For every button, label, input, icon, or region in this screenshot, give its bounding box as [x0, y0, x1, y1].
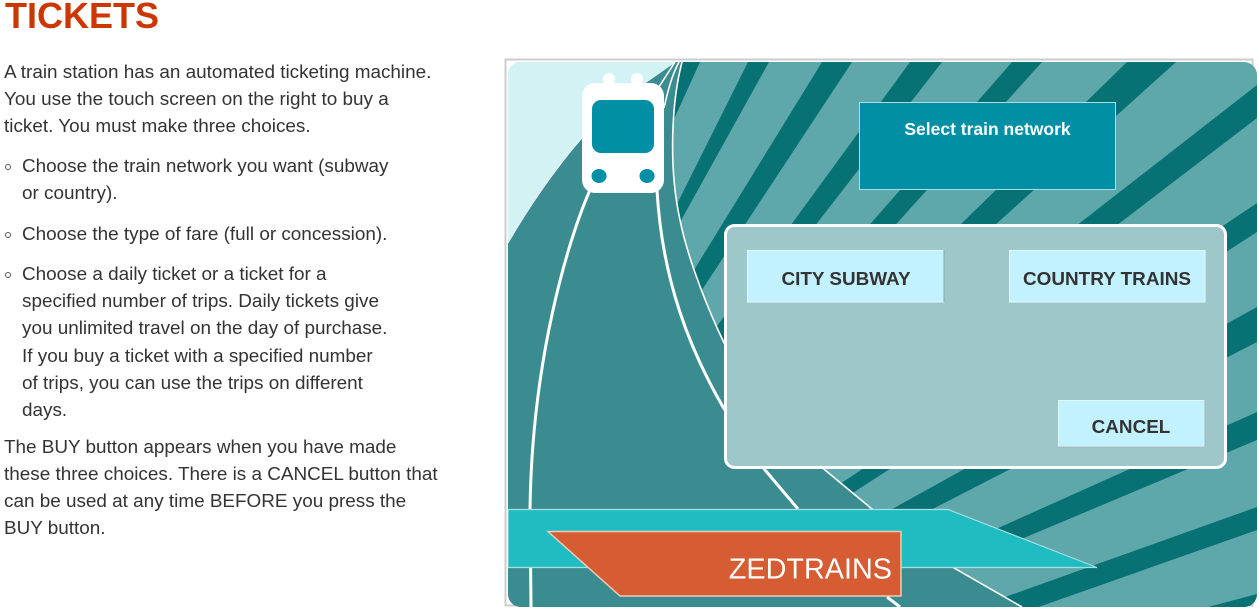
bullet: train network: or country).	[22, 183, 118, 204]
bullet: daily or trips ticket: Choose a daily ticket or a ticket for a	[22, 264, 326, 285]
bullet: daily or trips ticket: days.	[22, 400, 67, 421]
button: country trains: COUNTRY TRAINS	[1023, 269, 1191, 290]
text block: buy and cancel: can be used at any time BEFORE you press the	[4, 491, 406, 512]
train body	[582, 83, 664, 193]
text block: buy and cancel	[4, 437, 438, 539]
train	[582, 73, 664, 193]
distant rails	[657, 62, 679, 108]
bullet: daily or trips ticket	[5, 264, 387, 421]
prompt box: Select train network	[904, 119, 1071, 139]
train window	[592, 100, 654, 153]
ticketing machine screen	[506, 60, 1257, 610]
prompt box	[860, 102, 1116, 190]
sky	[508, 62, 676, 243]
text block: introduction: A train station has an automated ticketing machine.	[4, 62, 431, 83]
teal band	[508, 510, 1097, 568]
button: city subway	[748, 250, 944, 302]
button: city subway: CITY SUBWAY	[781, 269, 911, 290]
bullet: daily or trips ticket: If you buy a ticket with a specified number	[22, 346, 373, 367]
bullet: daily or trips ticket: you unlimited travel on the day of purchase.	[22, 318, 387, 339]
zedtrains banner: ZEDTRAINS	[729, 554, 892, 586]
text block: introduction	[4, 62, 431, 137]
options panel	[726, 226, 1226, 468]
bullet: type of fare: Choose the type of fare (full or concession).	[22, 224, 387, 245]
left rail	[530, 190, 590, 607]
button: country trains	[1010, 250, 1205, 302]
track bed edge	[508, 138, 582, 243]
track bed	[508, 62, 1022, 607]
train headlights	[592, 169, 606, 183]
zedtrains banner	[548, 532, 901, 596]
list: three choices	[5, 156, 388, 421]
button: cancel	[1058, 400, 1205, 447]
pantograph knobs	[603, 73, 615, 83]
background stripes	[649, 62, 1257, 610]
bullet: train network	[5, 156, 388, 204]
button: cancel: CANCEL	[1092, 417, 1170, 438]
right rail	[657, 190, 900, 607]
bullet: daily or trips ticket: of trips, you can use the trips on different	[22, 373, 363, 394]
text block: introduction: You use the touch screen on the right to buy a	[4, 89, 389, 110]
text block: buy and cancel: these three choices. There is a CANCEL button that	[4, 464, 438, 485]
bullet: daily or trips ticket: specified number of trips. Daily tickets give	[22, 291, 379, 312]
screen background	[508, 62, 1257, 610]
text block: buy and cancel: BUY button.	[4, 518, 106, 539]
text block: introduction: ticket. You must make three choices.	[4, 116, 311, 137]
text block: buy and cancel: The BUY button appears when you have made	[4, 437, 396, 458]
bullet: train network: Choose the train network you want (subway	[22, 156, 388, 177]
